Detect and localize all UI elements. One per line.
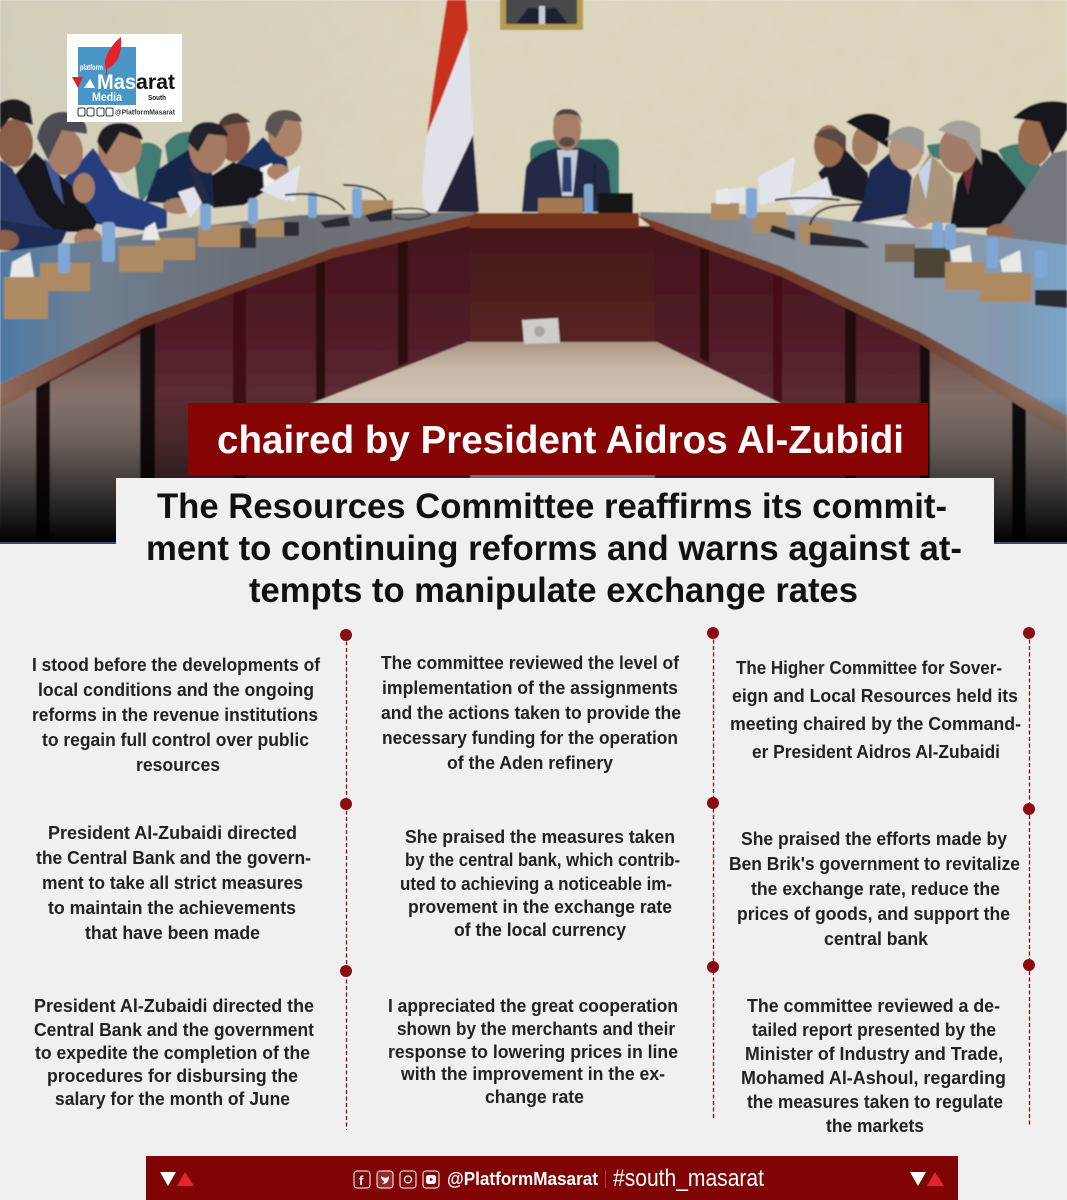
icon: red feather (105, 37, 121, 75)
text block: column 1 row 3: procedures for disbursing the (47, 1065, 298, 1086)
front arm (0, 220, 67, 253)
text block: column 2 row 2 (400, 826, 680, 940)
text block: column 1 row 3: President Al-Zubaidi directed the (34, 995, 314, 1016)
delegate R4 (950, 147, 1030, 228)
text block: column 1 row 3: Central Bank and the government (34, 1019, 314, 1040)
banner: chaired by: chaired by President Aidros Al-Zubidi (217, 419, 904, 462)
text block: column 2 row 1: necessary funding for the operation (382, 727, 678, 748)
logo: South (148, 95, 166, 102)
tissues (10, 188, 1022, 277)
text block: column 2 row 2: She praised the measures taken (405, 826, 675, 847)
logo: arat (136, 71, 175, 94)
left table top (0, 212, 478, 408)
text block: column 1 row 2: the Central Bank and the govern- (36, 847, 311, 868)
delegate 4 (145, 150, 214, 206)
text block: column 1 row 1: reforms in the revenue institutions (32, 704, 318, 725)
text block: column 2 row 2: provement in the exchange rate (408, 896, 672, 917)
framed portrait (500, 0, 583, 30)
text block: column 1 row 1: I stood before the developments of (32, 654, 321, 675)
text block: column 1 row 2 (36, 822, 311, 943)
text block: column 1 row 2: to maintain the achievements (48, 897, 296, 918)
icon: left triangles (160, 1172, 194, 1186)
text block: column 1 row 1: local conditions and the ongoing (38, 679, 314, 700)
text block: column 2 row 2: by the central bank, which contrib- (405, 849, 680, 870)
text block: column 3 row 3: the markets (826, 1115, 924, 1136)
column divider 1 (340, 629, 352, 1130)
icon: right triangles (910, 1172, 944, 1186)
text block: column 1 row 1 (32, 654, 321, 775)
president (522, 109, 633, 214)
text block: column 3 row 1: meeting chaired by the Command- (730, 713, 1021, 734)
logo: Media (92, 90, 122, 104)
water bottles (58, 188, 1047, 278)
text block: column 2 row 2: uted to achieving a noticeable im- (400, 873, 672, 894)
text block: column 2 row 3: change rate (485, 1086, 584, 1107)
text block: column 3 row 2 (729, 828, 1020, 949)
column divider 2 (707, 627, 719, 1118)
text block: column 3 row 3: Mohamed Al-Ashoul, regarding (741, 1067, 1006, 1088)
delegate R5 (990, 150, 1067, 246)
teal chairs (133, 132, 1040, 205)
headline: ment to continuing reforms and warns against at- (146, 529, 962, 568)
left table side panels (0, 224, 470, 560)
right table top (637, 212, 1067, 436)
papers (35, 157, 925, 265)
president chair (530, 139, 619, 198)
text block: column 3 row 2: the exchange rate, reduce the (751, 878, 1000, 899)
speaker (522, 318, 560, 344)
text block: column 2 row 3: with the improvement in the ex- (400, 1063, 665, 1084)
text block: column 3 row 3 (741, 995, 1006, 1136)
text block: column 1 row 1: to regain full control over public (42, 729, 309, 750)
text block: column 1 row 3: salary for the month of June (55, 1088, 290, 1109)
text block: column 2 row 1 (381, 652, 681, 773)
headline (116, 478, 994, 610)
footer bar: @PlatformMasarat (447, 1169, 598, 1189)
text block: column 2 row 1: implementation of the assignments (382, 677, 678, 698)
banner: chaired by (188, 403, 928, 475)
delegate 6 (237, 137, 288, 192)
right table side panels (655, 226, 1067, 560)
logo: Mas (97, 71, 136, 94)
delegate 5 (208, 162, 264, 208)
wall (0, 0, 1067, 260)
text block: column 1 row 2: ment to take all strict measures (42, 872, 303, 893)
text block: column 3 row 1: er President Aidros Al-Zubaidi (752, 741, 1000, 762)
footer bar (146, 1156, 958, 1200)
text block: column 1 row 1: resources (136, 754, 220, 775)
flag (422, 0, 479, 212)
text block: column 1 row 3: to expedite the completion of the (35, 1042, 310, 1063)
text block: column 3 row 1 (730, 657, 1021, 762)
carpet floor (310, 342, 782, 404)
delegate 1 (0, 160, 60, 240)
text block: column 1 row 2: that have been made (85, 922, 260, 943)
delegate 2 (13, 152, 97, 232)
social icons: f (359, 1173, 364, 1188)
meeting room photo (0, 0, 1067, 560)
logo social icons (78, 108, 113, 116)
delegate R2 (850, 150, 912, 224)
logo: @PlatformMasarat (115, 110, 176, 116)
text block: column 2 row 3: shown by the merchants and their (397, 1018, 675, 1039)
microphones and phones (0, 185, 1067, 308)
text block: column 2 row 1: and the actions taken to provide the (381, 702, 681, 723)
social icons (354, 1171, 439, 1188)
headline: tempts to manipulate exchange rates (249, 571, 858, 610)
text block: column 2 row 2: of the local currency (454, 919, 627, 940)
text block: column 3 row 2: Ben Brik's government to revitalize (729, 853, 1020, 874)
text block: column 2 row 3: I appreciated the great cooperation (388, 995, 678, 1016)
delegate R1 (818, 147, 868, 203)
text block: column 2 row 3: response to lowering prices in line (388, 1041, 678, 1062)
tissue boxes (4, 200, 1032, 319)
bottom black fade (0, 395, 1067, 543)
text block: column 3 row 2: central bank (824, 928, 929, 949)
text block: column 1 row 3 (34, 995, 314, 1109)
footer bar: #south_masarat (613, 1165, 764, 1192)
area below photo (0, 543, 1067, 1200)
delegate 3 (63, 148, 167, 231)
text block: column 2 row 3 (388, 995, 678, 1107)
text block: column 3 row 3: the measures taken to regulate (747, 1091, 1003, 1112)
text block: column 2 row 1: The committee reviewed the level of (381, 652, 680, 673)
text block: column 1 row 2: President Al-Zubaidi directed (48, 822, 297, 843)
right delegates (814, 101, 1067, 246)
central wood front (467, 213, 657, 342)
text block: column 2 row 1: of the Aden refinery (447, 752, 614, 773)
logo (67, 34, 182, 122)
headline: The Resources Committee reaffirms its commit- (157, 487, 947, 526)
text block: column 3 row 3: The committee reviewed a de- (747, 995, 1000, 1016)
text block: column 3 row 1: eign and Local Resources held its (732, 685, 1018, 706)
text block: column 3 row 1: The Higher Committee for Sover- (736, 657, 1002, 678)
text block: column 3 row 3: tailed report presented by the (752, 1019, 996, 1040)
icon: logo triangles (72, 77, 95, 88)
text block: column 3 row 2: She praised the efforts made by (741, 828, 1008, 849)
left delegates (0, 99, 302, 253)
text block: column 3 row 2: prices of goods, and support the (737, 903, 1010, 924)
delegate R3 (897, 153, 954, 223)
logo: platform (80, 63, 103, 72)
text block: column 3 row 3: Minister of Industry and Trade, (745, 1043, 1003, 1064)
column divider 3 (1023, 627, 1035, 1125)
